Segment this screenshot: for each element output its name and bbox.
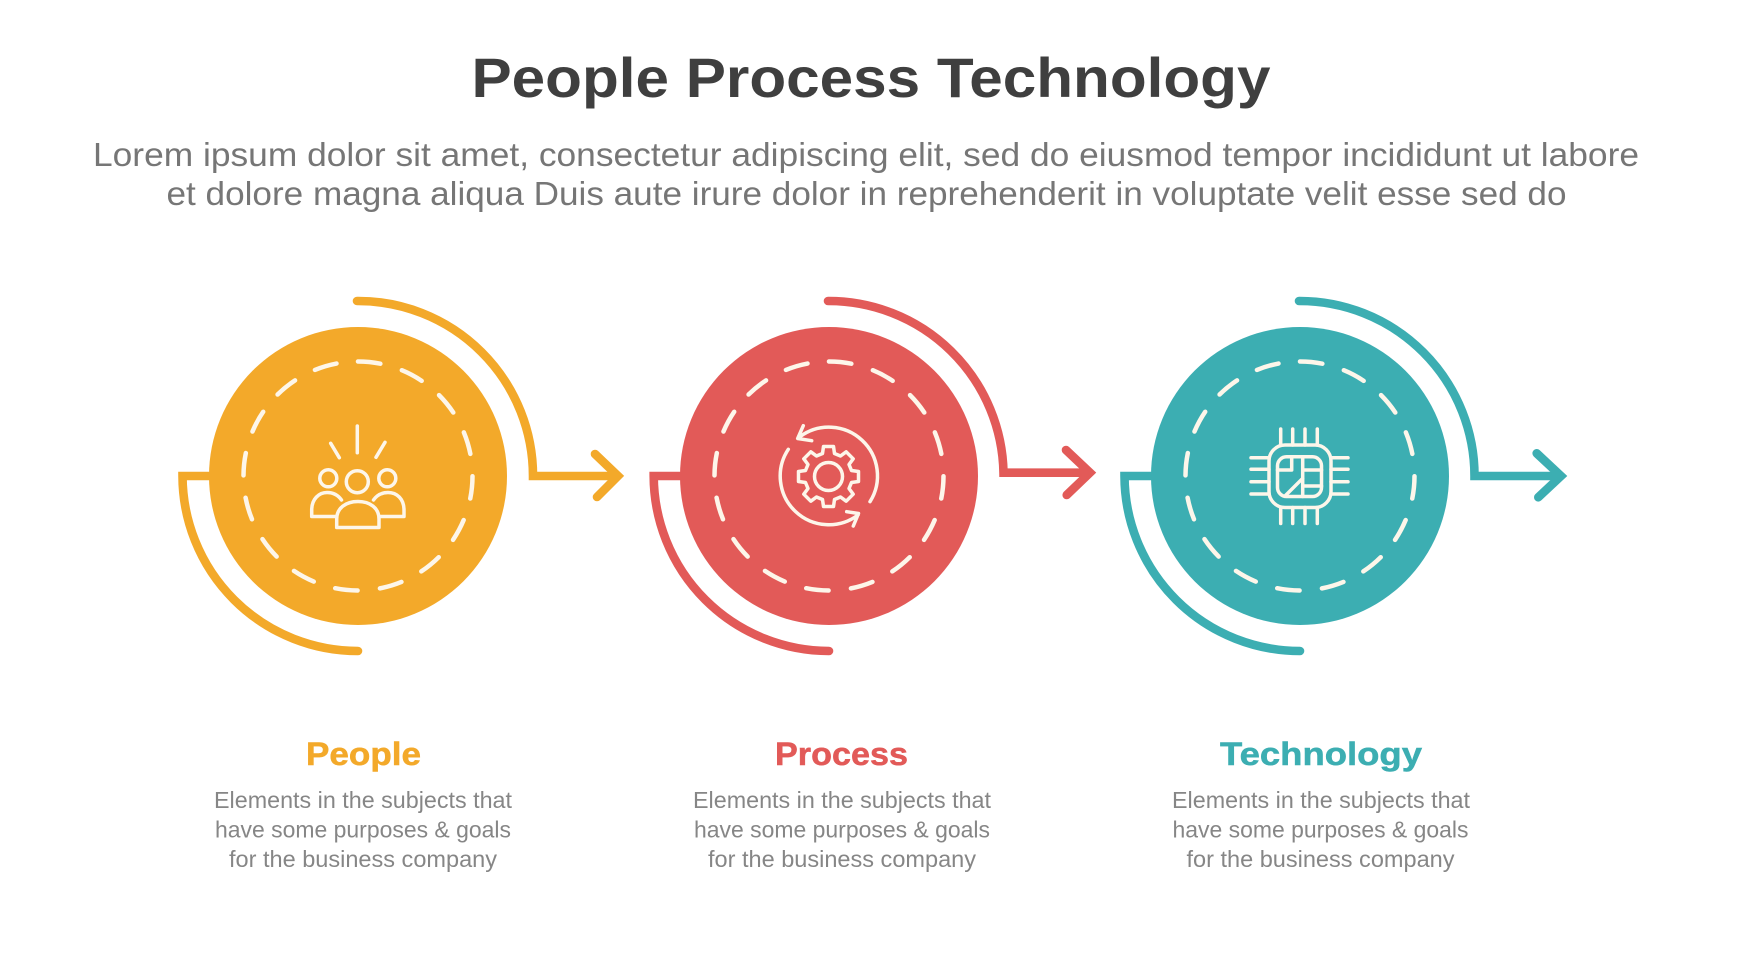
description: technology: have some purposes & goals bbox=[1172, 816, 1468, 842]
description: process: for the business company bbox=[708, 846, 976, 872]
icon: microchip bbox=[1251, 429, 1348, 524]
subtitle text block bbox=[93, 136, 1639, 212]
dashed ring: process bbox=[714, 362, 944, 590]
outer arc and arrow: technology bbox=[1124, 301, 1561, 651]
description: technology bbox=[1172, 787, 1470, 872]
description: technology: for the business company bbox=[1186, 846, 1455, 872]
description: people: for the business company bbox=[229, 846, 497, 872]
heading: technology: Technology bbox=[1220, 736, 1422, 772]
description: technology: Elements in the subjects that bbox=[1172, 787, 1470, 813]
icon: gear with cycle arrows bbox=[780, 426, 877, 526]
title: People Process Technology bbox=[472, 46, 1270, 109]
text block: people bbox=[214, 736, 512, 872]
heading: people: People bbox=[306, 736, 421, 772]
description: process: have some purposes & goals bbox=[694, 816, 990, 842]
description: process bbox=[693, 787, 991, 872]
panel: process step bbox=[654, 301, 1090, 651]
dashed ring: technology bbox=[1186, 362, 1414, 590]
description: people: have some purposes & goals bbox=[215, 816, 511, 842]
text block: process bbox=[693, 736, 991, 872]
panel: technology step bbox=[1124, 301, 1561, 651]
subtitle text block: Lorem ipsum dolor sit amet, consectetur adipiscing elit, sed do eiusmod tempor incididunt ut labore bbox=[93, 136, 1639, 173]
circle: process bbox=[680, 327, 978, 625]
panel: people step bbox=[182, 301, 618, 651]
circle: people bbox=[209, 327, 507, 625]
description: people bbox=[214, 787, 512, 872]
subtitle text block: et dolore magna aliqua Duis aute irure dolor in reprehenderit in voluptate velit esse sed do bbox=[166, 175, 1566, 212]
description: process: Elements in the subjects that bbox=[693, 787, 991, 813]
description: people: Elements in the subjects that bbox=[214, 787, 512, 813]
circle: technology bbox=[1151, 327, 1449, 625]
dashed ring: people bbox=[244, 362, 472, 590]
heading: process: Process bbox=[775, 736, 908, 772]
outer arc and arrow: process bbox=[654, 301, 1090, 651]
icon: people group bbox=[312, 426, 404, 528]
text block: technology bbox=[1172, 736, 1470, 872]
outer arc and arrow: people bbox=[182, 301, 618, 651]
